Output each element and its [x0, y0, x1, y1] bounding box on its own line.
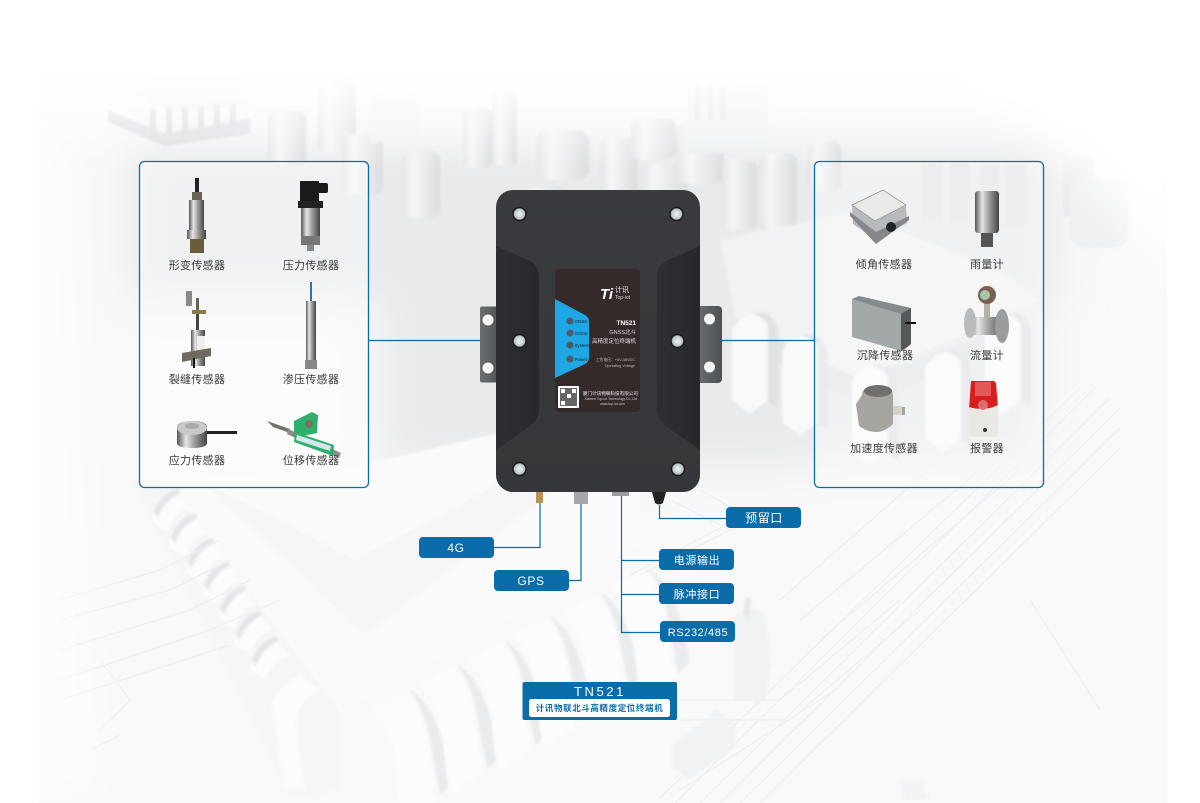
label: 应力传感器	[169, 453, 225, 467]
haze	[130, 140, 1060, 470]
icon: tilt sensor	[850, 190, 909, 244]
title: TN521 badge	[522, 682, 677, 720]
icon: settlement sensor	[852, 296, 916, 351]
icon: seepage sensor	[305, 282, 317, 369]
label: 压力传感器	[283, 259, 339, 272]
connectors	[536, 492, 666, 504]
callout: 4G: 4G	[447, 541, 465, 555]
side panels	[496, 246, 539, 450]
callout: pulse port	[659, 583, 734, 604]
device label plate: Top-iot	[615, 295, 631, 301]
device label plate: 高精度定位终端机	[592, 337, 636, 345]
top and side fades	[39, 0, 1167, 170]
icon: pressure sensor	[298, 181, 328, 251]
label: 加速度传感器	[850, 441, 918, 455]
label: 形变传感器	[169, 258, 225, 272]
circuit traces	[60, 388, 1120, 803]
connector lines	[369, 340, 815, 632]
label: 雨量计	[970, 258, 1004, 271]
housing	[496, 190, 700, 492]
right chip	[720, 212, 1040, 466]
callout: GPS: GPS	[517, 574, 545, 588]
device label plate: 厦门计讯物联科技有限公司	[583, 390, 638, 397]
LED panel	[555, 299, 589, 378]
title: TN521 badge: 计讯物联北斗高精度定位终端机	[536, 703, 663, 713]
label: 倾角传感器	[856, 258, 912, 271]
screws	[513, 208, 684, 476]
device label plate: GNSS	[574, 319, 587, 324]
icon: displacement sensor	[267, 412, 341, 458]
device label plate: 计讯	[615, 285, 629, 294]
callout: RS232/485: RS232/485	[668, 627, 728, 639]
product lines: GNSS北斗	[609, 328, 636, 336]
device label plate: www.top-iot.com	[600, 402, 625, 406]
icon: strain sensor	[187, 178, 206, 253]
panel: right sensors	[814, 162, 1044, 488]
icon: rain gauge	[975, 191, 999, 247]
device: TN521 terminal	[480, 190, 722, 504]
device label plate: System	[574, 343, 590, 348]
label: 渗压传感器	[283, 372, 339, 386]
device label plate: 工作电压：+5V-35VDC	[596, 357, 635, 362]
icon: flow meter	[964, 286, 1009, 343]
model: TN521	[616, 320, 636, 327]
label: 位移传感器	[283, 453, 339, 467]
label: 沉降传感器	[857, 348, 913, 362]
label: 报警器	[970, 441, 1004, 455]
QR code	[558, 386, 579, 408]
callout: reserved port: 预留口	[745, 511, 783, 525]
label: 流量计	[970, 348, 1004, 362]
device label plate: Online	[574, 331, 588, 336]
callout: power output	[659, 549, 734, 570]
icon: alarm	[969, 381, 998, 437]
outside margins	[0, 0, 39, 803]
title: TN521 badge: TN521	[574, 684, 626, 699]
callout: GPS	[494, 570, 569, 591]
top components	[108, 78, 1128, 248]
callout: power output: 电源输出	[674, 553, 720, 567]
device label plate: Power	[574, 357, 588, 362]
callout: 4G	[419, 537, 494, 558]
icon: accelerometer	[856, 385, 905, 432]
callout: reserved port	[726, 507, 801, 528]
icon: crack sensor	[182, 291, 211, 368]
panel: left sensors	[140, 162, 368, 488]
label: 裂缝传感器	[169, 372, 225, 386]
callout: pulse port: 脉冲接口	[674, 587, 720, 601]
icon: force sensor	[177, 421, 237, 448]
mounting tabs	[480, 306, 722, 383]
lower-left big chip	[130, 400, 930, 803]
logo: Ti	[600, 286, 614, 303]
device label plate	[555, 269, 640, 412]
device label plate: Xiamen Top-iot Technology Co.,Ltd	[585, 397, 637, 401]
device label plate: Operating Voltage	[605, 364, 635, 368]
callout: RS232/485	[660, 621, 735, 642]
